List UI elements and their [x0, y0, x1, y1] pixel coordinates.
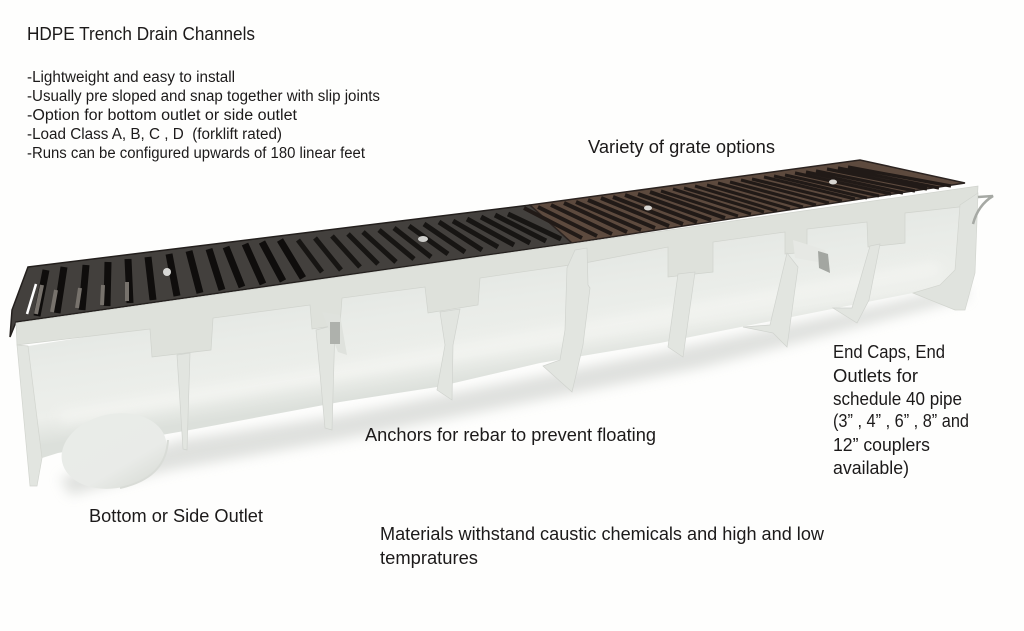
floor shadow: [60, 285, 968, 495]
top rim with tabs: [16, 186, 978, 357]
channel body: [28, 200, 965, 458]
label: materials: tempratures: [380, 548, 478, 568]
feature list: -Runs can be configured upwards of 180 linear feet: [27, 145, 366, 162]
label: materials: Materials withstand caustic chemicals and high and low: [380, 524, 825, 544]
body highlight band: [60, 268, 940, 418]
heading: HDPE Trench Drain Channels: [27, 24, 255, 44]
grate: right rusty section: [524, 160, 965, 243]
feature list: -Option for bottom outlet or side outlet: [27, 107, 298, 124]
end hook: [973, 196, 993, 224]
label: end caps: (3” , 4” , 6” , 8” and: [833, 411, 969, 431]
drain channel product illustration: [10, 160, 993, 498]
connector clips: [316, 240, 830, 430]
label: outlet: Bottom or Side Outlet: [89, 506, 263, 526]
label: end caps: available): [833, 458, 909, 478]
label: end caps: schedule 40 pipe: [833, 389, 962, 409]
feature list: -Lightweight and easy to install: [27, 69, 235, 86]
label: materials: [380, 524, 825, 568]
grate: left section: [10, 205, 572, 337]
label: grate options: Variety of grate options: [588, 137, 775, 157]
label: end caps: [833, 342, 969, 478]
feature list: -Usually pre sloped and snap together with slip joints: [27, 88, 380, 105]
end plate: [913, 193, 978, 310]
feature list: -Load Class A, B, C , D (forklift rated): [27, 126, 282, 143]
label: anchors: Anchors for rebar to prevent floating: [365, 425, 656, 445]
label: end caps: End Caps, End: [833, 342, 945, 362]
anchor ribs: [177, 244, 880, 450]
side outlet: [54, 404, 174, 498]
left end plate: [17, 345, 42, 486]
label: end caps: Outlets for: [833, 366, 918, 386]
label: end caps: 12” couplers: [833, 435, 930, 455]
feature list: [27, 69, 380, 162]
